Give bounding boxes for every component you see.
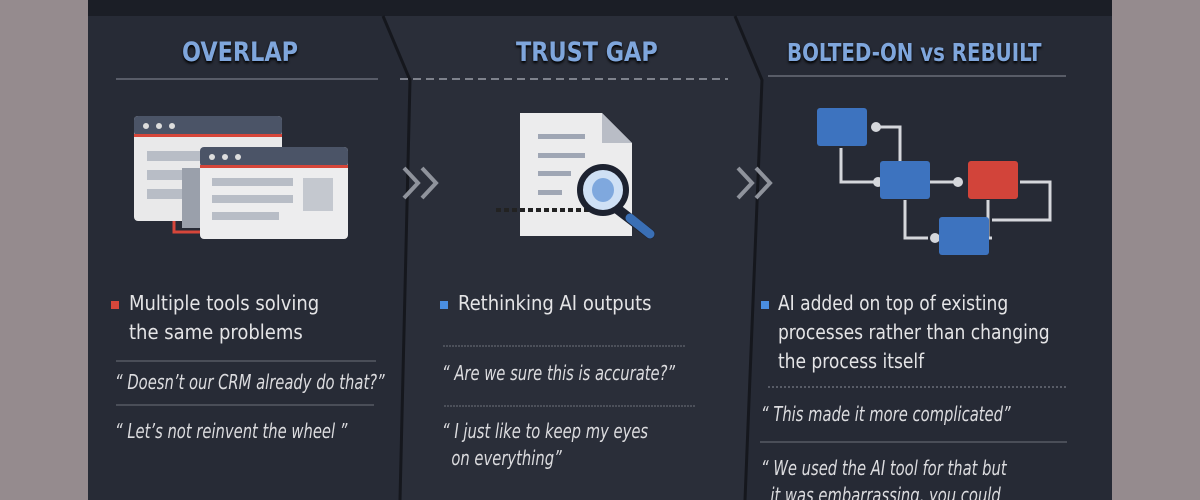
quote: eyes: on everything”: [451, 446, 562, 470]
quote: complicated: “ This made it more complicated”: [761, 402, 1011, 426]
heading: bolted-on vs rebuilt: BOLTED-ON vs REBUILT: [787, 38, 1042, 67]
quote: eyes: “ I just like to keep my eyes: [442, 419, 648, 443]
arrow: chevrons 1: [402, 166, 439, 200]
text: overlap bullet: [111, 291, 319, 344]
text: bolted-on bullet: the process itself: [778, 349, 924, 373]
icon: document with magnifier: [496, 113, 655, 239]
quote: eyes: [442, 419, 648, 470]
text: bolted-on bullet: AI added on top of existing: [778, 291, 1008, 315]
quote: accurate: “ Are we sure this is accurate?”: [442, 361, 675, 385]
heading: trust gap: TRUST GAP: [516, 37, 658, 68]
arrow: chevrons 2: [736, 166, 773, 200]
text: overlap bullet: the same problems: [129, 320, 303, 344]
quote: embarrassing: [761, 456, 1008, 500]
text: bolted-on bullet: processes rather than changing: [778, 320, 1050, 344]
text: trust gap bullet: Rethinking AI outputs: [458, 291, 652, 315]
icon: overlapping windows: [134, 116, 348, 239]
quote: wheel: “ Let’s not reinvent the wheel ”: [115, 419, 347, 443]
icon: flowchart: [817, 108, 1052, 255]
text: bolted-on bullet: [761, 291, 1050, 373]
quote: embarrassing: “ We used the AI tool for that but: [761, 456, 1007, 480]
quote: crm: “ Doesn’t our CRM already do that?”: [115, 370, 385, 394]
text: overlap bullet: Multiple tools solving: [129, 291, 319, 315]
heading: overlap: OVERLAP: [182, 37, 298, 68]
